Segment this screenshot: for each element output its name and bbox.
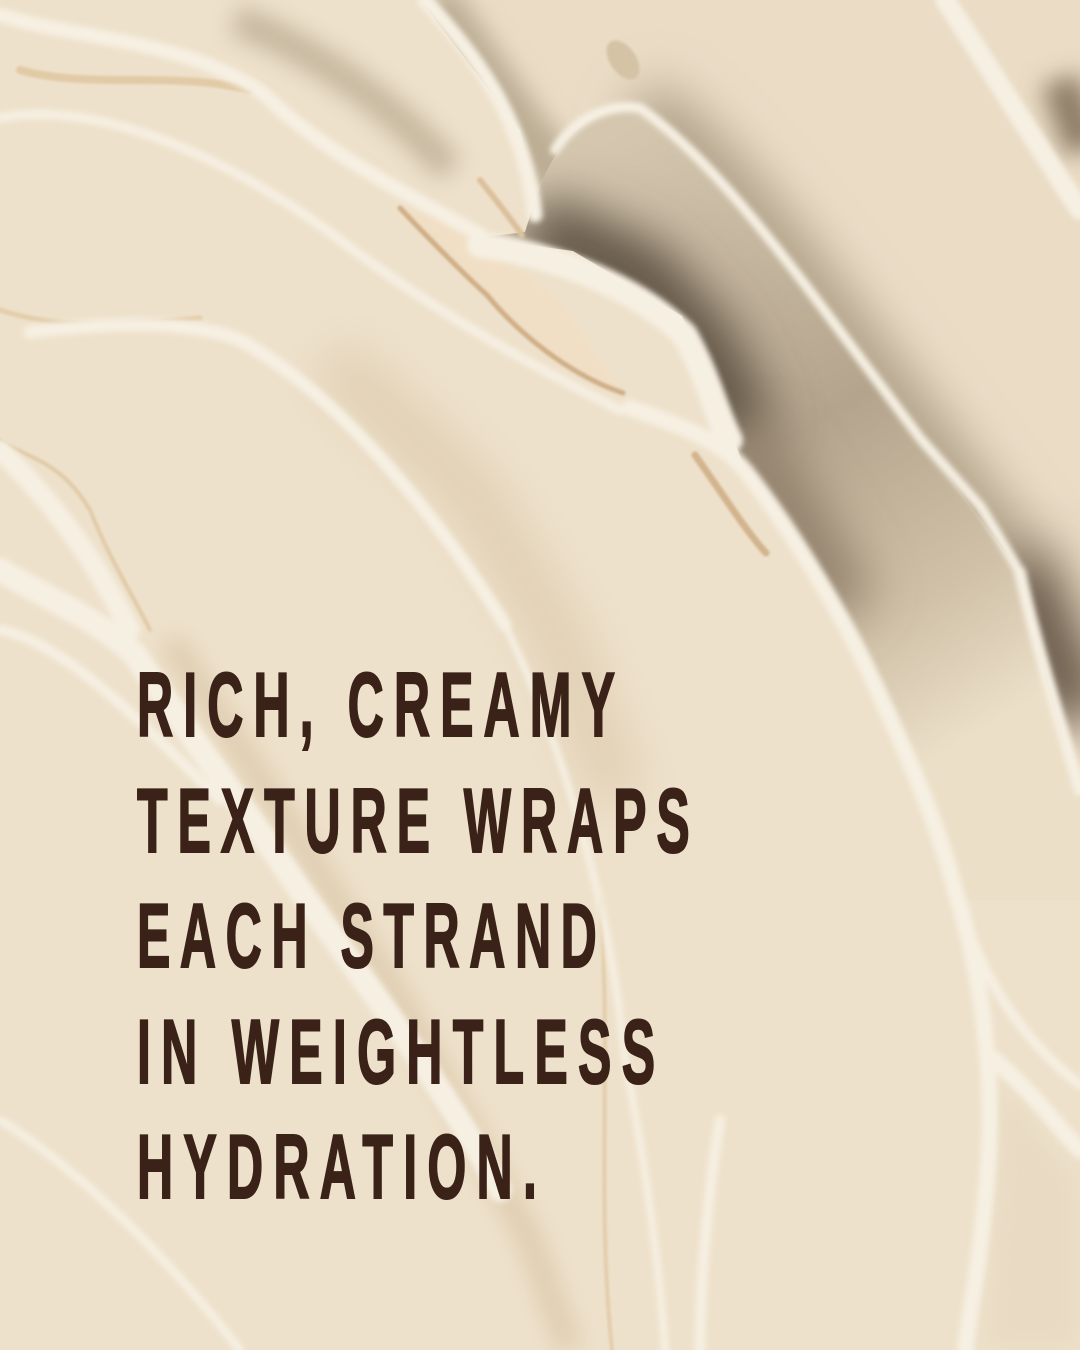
upper left stroke shadow [235, 20, 450, 170]
line 2: TEXTURE WRAPS [137, 770, 690, 872]
line 1: RICH, CREAMY [137, 654, 615, 756]
upper right stroke with soft shadow [420, 0, 1080, 800]
line 5: HYDRATION. [137, 1116, 537, 1218]
shaded band between ridge and white line [494, 110, 1036, 744]
line 4: IN WEIGHTLESS [137, 1001, 655, 1103]
soft shade beside the central arc [330, 360, 620, 800]
icon: dimple in the cream [600, 35, 646, 85]
line 3: EACH STRAND [137, 885, 597, 987]
peach area beside ridge [400, 208, 623, 395]
tan grooves [0, 70, 766, 1350]
headline [137, 654, 690, 1218]
